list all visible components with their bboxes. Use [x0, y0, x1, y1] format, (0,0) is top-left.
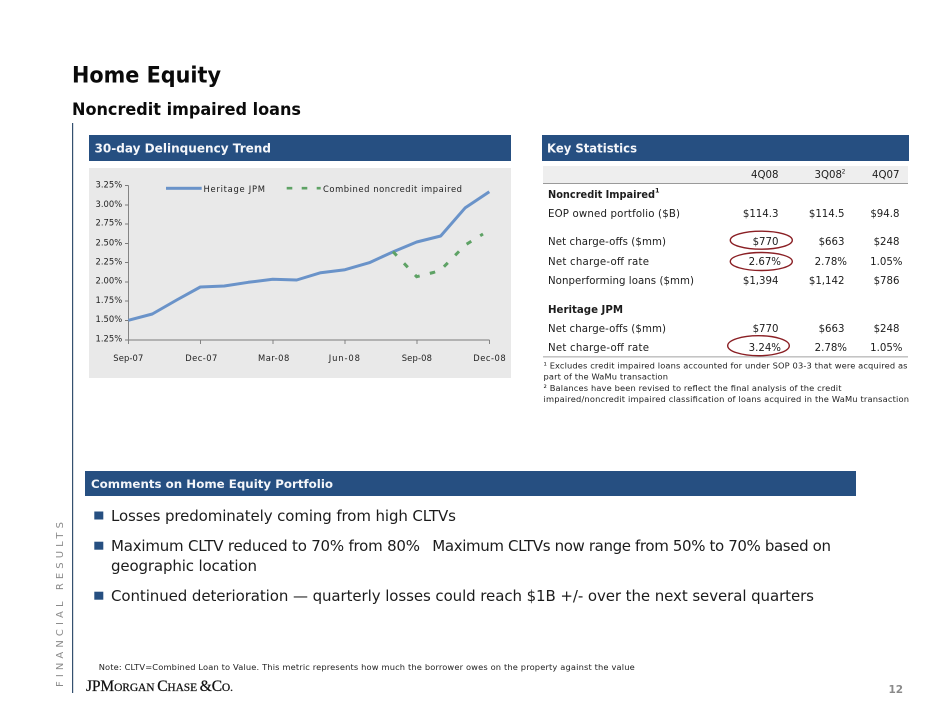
y axis with labels: 2.00%	[96, 276, 122, 286]
panel: key statistics	[542, 135, 909, 404]
y axis with labels: 1.50%	[96, 314, 122, 324]
bullet 3: Continued deterioration — quarterly losses could reach $1B +/- over the next several quarters	[111, 587, 814, 605]
series: Heritage JPM	[128, 192, 489, 320]
section: noncredit impaired: $1,394	[743, 276, 778, 287]
section: noncredit impaired: $786	[874, 276, 900, 287]
table column headers: 2	[842, 168, 846, 176]
section: noncredit impaired: $1,142	[809, 276, 844, 287]
comments heading bar	[85, 471, 856, 496]
section: noncredit impaired: $114.5	[809, 209, 844, 220]
x axis with labels: Dec-07	[185, 353, 217, 363]
left vertical rule	[72, 123, 73, 693]
table column headers	[543, 166, 908, 184]
section: noncredit impaired: 2.67%	[749, 257, 781, 268]
section: heritage JPM: 3.24%	[749, 343, 781, 354]
section: noncredit impaired: $94.8	[870, 209, 900, 220]
footnotes: ¹ Excludes credit impaired loans accounted for under SOP 03-3 that were acquired as	[544, 360, 908, 370]
key statistics heading bar: Key Statistics	[547, 140, 637, 156]
y axis with labels: 2.50%	[96, 238, 122, 248]
y axis with labels: 3.25%	[96, 180, 122, 190]
chart background	[89, 168, 511, 378]
bullet 1: Losses predominately coming from high CLTVs	[111, 507, 456, 525]
key statistics heading bar	[542, 135, 909, 161]
section: noncredit impaired: Noncredit Impaired	[548, 190, 655, 201]
section: noncredit impaired: $114.3	[743, 209, 778, 220]
subtitle: Noncredit impaired loans	[72, 100, 301, 119]
section: heritage JPM: Net charge-off rate	[548, 343, 649, 354]
callout ellipses	[728, 231, 792, 356]
section: noncredit impaired	[548, 186, 903, 287]
bullet 2: geographic location	[111, 557, 257, 575]
logo: JPMORGAN CHASE &CO.	[86, 678, 233, 695]
panel: delinquency trend chart	[89, 135, 511, 378]
y axis with labels: 3.00%	[96, 199, 122, 209]
section: heritage JPM: $248	[874, 324, 900, 335]
section: noncredit impaired: 1.05%	[870, 257, 903, 268]
comments heading bar: Comments on Home Equity Portfolio	[91, 477, 333, 491]
section: noncredit impaired: Net charge-offs ($mm)	[548, 237, 666, 248]
table column headers: 4Q08	[751, 170, 778, 181]
section: noncredit impaired: $770	[753, 237, 778, 248]
y axis with labels: 1.75%	[96, 295, 122, 305]
x axis with labels: Mar-08	[258, 353, 289, 363]
legend	[166, 184, 462, 194]
table column headers: 4Q07	[872, 170, 900, 181]
chart heading bar	[89, 135, 511, 161]
section: noncredit impaired: $663	[819, 237, 844, 248]
footnotes: impaired/noncredit impaired classification of loans acquired in the WaMu transaction	[544, 394, 909, 404]
section: heritage JPM: 2.78%	[815, 343, 847, 354]
footnotes: ² Balances have been revised to reflect the final analysis of the credit	[544, 383, 842, 393]
section: heritage JPM: Net charge-offs ($mm)	[548, 324, 666, 335]
y axis with labels: 1.25%	[96, 334, 122, 344]
x axis with labels: Sep-08	[402, 353, 432, 363]
y axis with labels: 2.75%	[96, 218, 122, 228]
x axis with labels	[113, 340, 506, 363]
note: Note: CLTV=Combined Loan to Value. This metric represents how much the borrower owes on the property against the value	[99, 662, 635, 672]
bullet 2: Maximum CLTV reduced to 70% from 80%	[111, 537, 420, 555]
x axis with labels: Dec-08	[473, 353, 506, 363]
x axis with labels: Sep-07	[113, 353, 143, 363]
x axis with labels: Jun-08	[328, 353, 360, 363]
panel: comments	[85, 471, 856, 605]
section: heritage JPM: $663	[819, 324, 844, 335]
y axis with labels: 2.25%	[96, 256, 122, 266]
sidebar label: FINANCIAL RESULTS	[55, 522, 66, 687]
section: noncredit impaired: Net charge-off rate	[548, 257, 649, 268]
bullet 2: Maximum CLTVs now range from 50% to 70% based on	[432, 537, 831, 555]
footnotes	[544, 360, 909, 404]
legend: Combined noncredit impaired	[323, 184, 462, 194]
table bottom rule	[543, 356, 908, 358]
chart heading bar: 30-day Delinquency Trend	[94, 140, 271, 156]
section: noncredit impaired: 1	[655, 186, 660, 194]
section: noncredit impaired: 2.78%	[815, 257, 847, 268]
bullet 2	[94, 537, 831, 575]
y axis with labels	[96, 180, 128, 344]
footnotes: part of the WaMu transaction	[544, 372, 668, 382]
series: Combined noncredit impaired	[393, 234, 483, 277]
page number: 12	[888, 684, 903, 696]
section: heritage JPM	[548, 305, 903, 354]
section: heritage JPM: $770	[753, 324, 778, 335]
section: noncredit impaired: Nonperforming loans ($mm)	[548, 276, 694, 287]
section: heritage JPM: 1.05%	[870, 343, 903, 354]
legend: Heritage JPM	[204, 184, 265, 194]
table column headers: 3Q08	[815, 170, 842, 181]
section: noncredit impaired: $248	[874, 237, 900, 248]
title: Home Equity	[72, 64, 221, 88]
section: noncredit impaired: EOP owned portfolio ($B)	[548, 209, 680, 220]
section: heritage JPM: Heritage JPM	[548, 305, 623, 316]
